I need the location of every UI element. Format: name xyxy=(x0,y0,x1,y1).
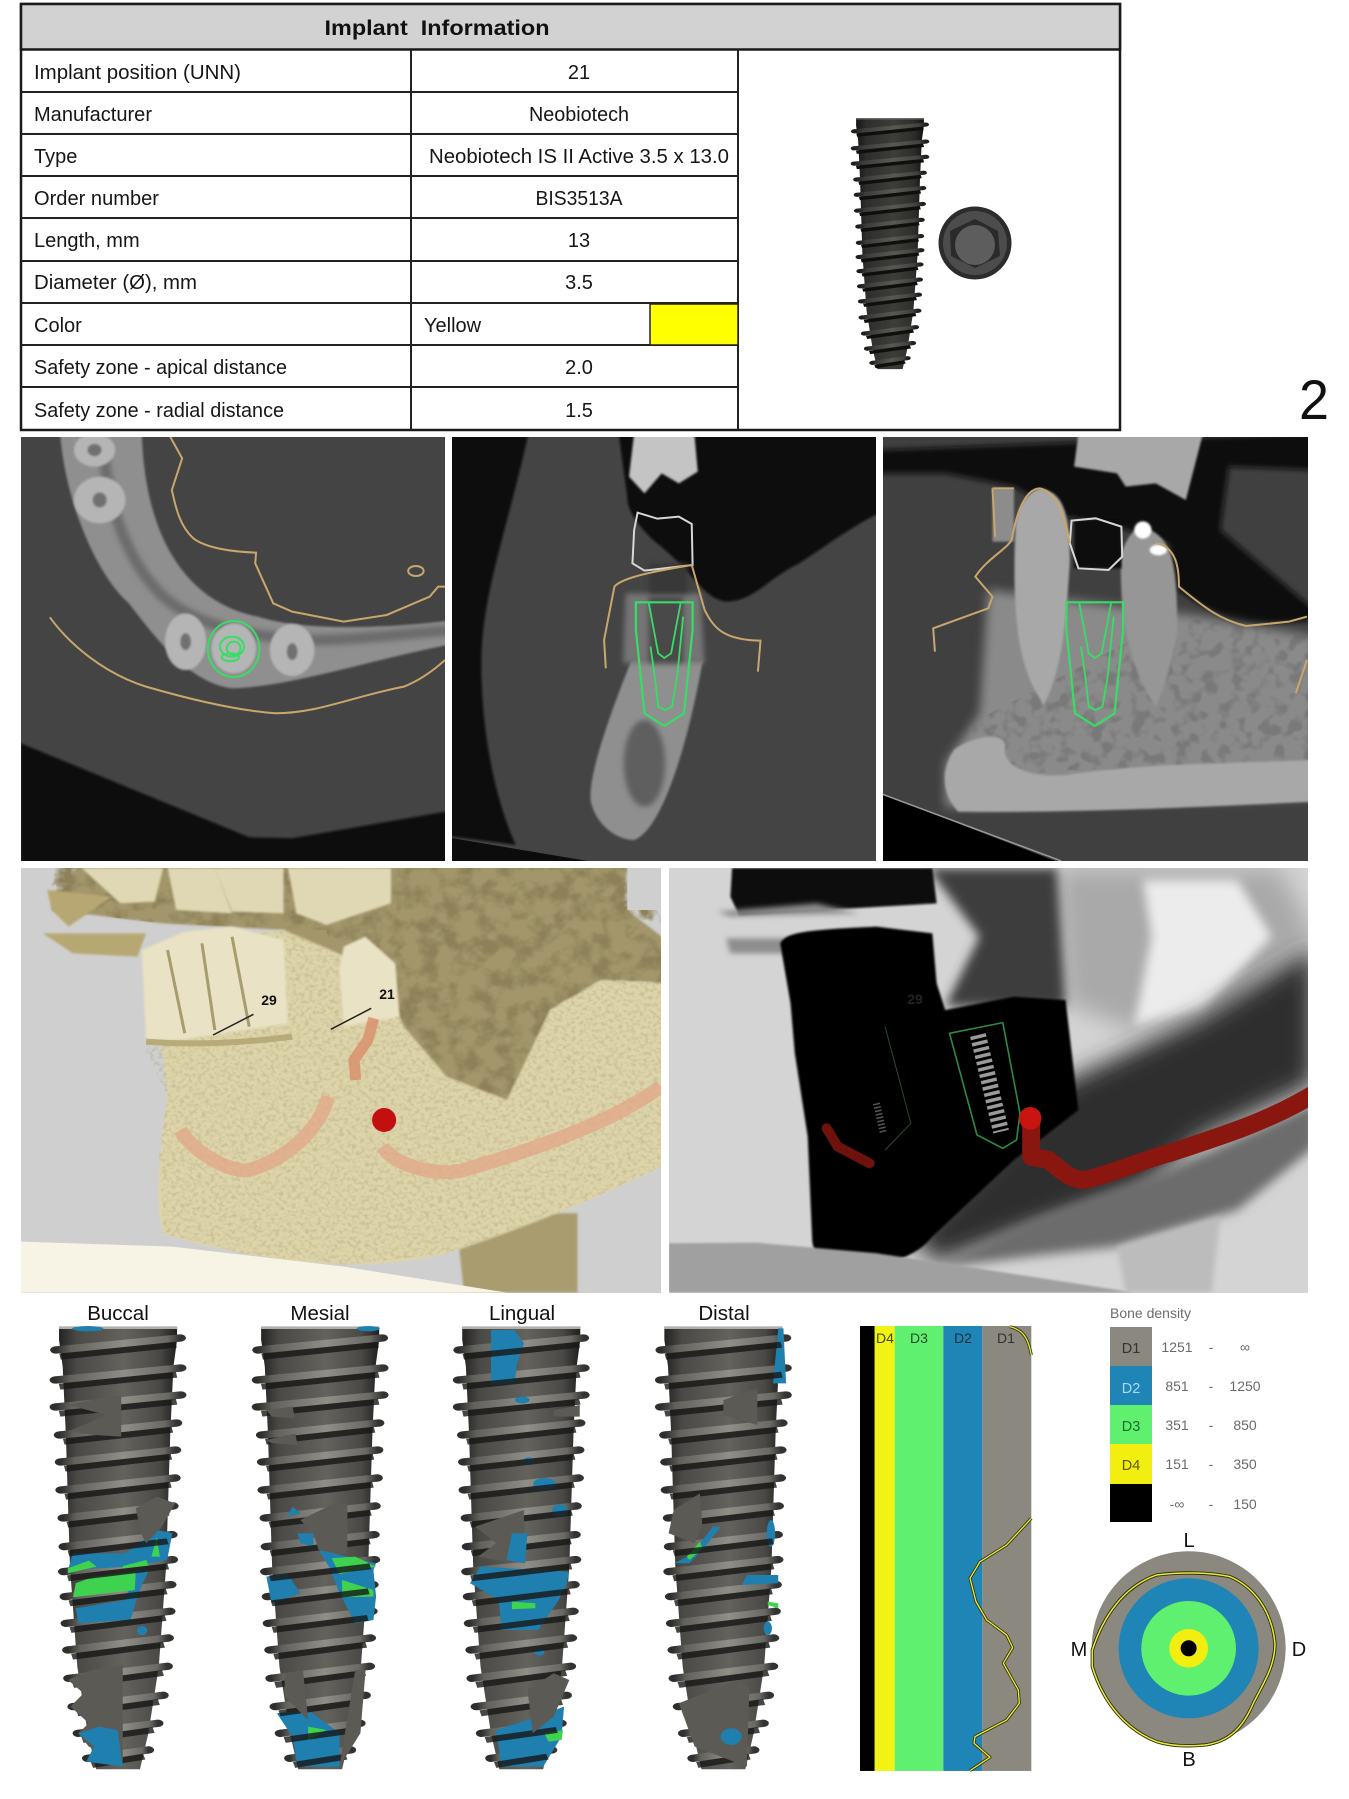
smear fragments xyxy=(718,903,859,953)
mesial flutes xyxy=(266,1407,366,1767)
legend ranges: 850 xyxy=(1233,1417,1257,1433)
black left band xyxy=(452,437,529,846)
buccal flutes xyxy=(68,1397,175,1763)
density profile strip xyxy=(860,1326,1031,1771)
crown outline xyxy=(632,513,693,571)
air gap xyxy=(619,433,885,602)
legend ranges xyxy=(1161,1339,1261,1512)
lingual green density xyxy=(512,1602,563,1742)
upper teeth xyxy=(1074,433,1203,500)
orientation letters: D xyxy=(1292,1639,1306,1661)
black bottom corner xyxy=(452,838,588,861)
legend ranges: - xyxy=(1209,1417,1214,1433)
legend ranges: ∞ xyxy=(1240,1339,1250,1355)
nerve canal: left segment xyxy=(180,1097,328,1170)
density strip labels: D4 xyxy=(876,1330,894,1346)
legend: bone density xyxy=(1110,1305,1261,1522)
white sinus area xyxy=(1134,880,1272,1027)
page number: 2 xyxy=(1299,368,1329,431)
table header: Implant Information xyxy=(324,17,550,40)
mandible translucent dark xyxy=(911,947,1315,1263)
view titles: Lingual xyxy=(489,1302,555,1325)
panel: cross-section CT slice xyxy=(443,433,885,863)
orientation letters: B xyxy=(1182,1749,1196,1771)
implant safety outline xyxy=(1066,602,1123,726)
lower border grey xyxy=(945,1103,1315,1263)
view titles: Distal xyxy=(698,1302,750,1325)
faint plate shadow xyxy=(1117,1217,1220,1293)
gum ridge xyxy=(146,1037,292,1043)
row values: 21 xyxy=(568,62,590,84)
legend ranges: - xyxy=(1209,1496,1214,1512)
small outline ring xyxy=(408,566,424,576)
label: 29: 29 xyxy=(261,992,277,1008)
row values: Neobiotech xyxy=(529,104,629,126)
row labels: Order number xyxy=(34,188,159,210)
row values: 13 xyxy=(568,230,590,252)
table grid rows xyxy=(21,50,738,430)
upper teeth xyxy=(82,868,391,925)
nerve canal: upper segment xyxy=(354,1018,374,1080)
row values: 2.0 xyxy=(565,357,593,379)
row labels: Manufacturer xyxy=(34,104,152,126)
legend swatch labels: D2 xyxy=(1122,1381,1140,1397)
radial density diagram xyxy=(1092,1551,1286,1746)
teeth in arch xyxy=(74,433,315,676)
background cancellous volume xyxy=(52,867,666,1103)
upper cortical plates xyxy=(623,593,705,663)
row values: 3.5 xyxy=(565,272,593,294)
orientation letters xyxy=(1071,1530,1306,1771)
bright filling xyxy=(1134,521,1167,555)
distal apical blue xyxy=(721,1728,742,1745)
left tooth xyxy=(1014,488,1070,705)
view titles xyxy=(87,1302,750,1325)
legend ranges: 151 xyxy=(1165,1456,1189,1472)
panel: implant information table xyxy=(21,4,1120,430)
distal blue density xyxy=(674,1328,786,1635)
black crown gap xyxy=(1074,520,1121,568)
density curve top xyxy=(1010,1327,1031,1355)
mandible bone xyxy=(590,660,703,840)
tooth root lines xyxy=(168,937,249,1033)
tooth marker lines xyxy=(213,1008,371,1035)
implant rings xyxy=(208,621,260,677)
lower back volume xyxy=(455,1213,577,1293)
mental foramen marker xyxy=(372,1108,396,1132)
black bottom corner xyxy=(883,795,1055,861)
implant site shadow xyxy=(649,597,683,663)
legend swatch labels: D3 xyxy=(1122,1419,1140,1435)
row labels: Color xyxy=(34,315,82,337)
mandible arch xyxy=(60,433,455,688)
density strip labels xyxy=(876,1330,1015,1346)
bottom plate xyxy=(669,1243,1134,1293)
mandibular bone xyxy=(945,590,1315,807)
implant 29 faint xyxy=(876,1027,911,1150)
gum outline xyxy=(604,565,760,672)
legend ranges: 1251 xyxy=(1161,1339,1193,1355)
implant 21 threads xyxy=(978,1035,1001,1132)
dark column xyxy=(928,868,1066,1007)
legend ranges: - xyxy=(1209,1378,1214,1394)
view titles: Mesial xyxy=(290,1302,350,1325)
implant illustration xyxy=(854,118,926,369)
tooth pulp spots xyxy=(88,444,297,660)
right tooth xyxy=(1121,527,1177,707)
row labels: Length, mm xyxy=(34,230,140,252)
legend ranges: 350 xyxy=(1233,1456,1257,1472)
row labels: Safety zone - apical distance xyxy=(34,357,287,379)
buccal blue density xyxy=(68,1326,172,1635)
row labels: Type xyxy=(34,146,77,168)
implant view: lingual xyxy=(459,1327,584,1769)
color swatch: yellow xyxy=(650,304,738,345)
legend swatches xyxy=(1110,1327,1152,1522)
upper air band xyxy=(876,433,1315,627)
upper gum fragments xyxy=(43,890,146,957)
buccal apical blue xyxy=(78,1727,123,1767)
row labels: Safety zone - radial distance xyxy=(34,400,284,422)
upper jaw black xyxy=(730,868,937,915)
implant inner outline xyxy=(1079,603,1114,710)
buccal green density xyxy=(68,1537,160,1597)
background mottle xyxy=(52,868,666,1103)
orientation letters: M xyxy=(1071,1639,1087,1661)
legend ranges: -∞ xyxy=(1170,1496,1184,1512)
legend title: Bone density xyxy=(1110,1305,1191,1321)
density strip labels: D1 xyxy=(997,1330,1015,1346)
density curve xyxy=(970,1518,1031,1771)
distal flutes xyxy=(669,1388,757,1767)
dark background corner xyxy=(21,743,455,863)
small root left xyxy=(992,488,1014,542)
row labels: Implant position (UNN) xyxy=(34,62,241,84)
legend swatch labels: D1 xyxy=(1122,1341,1140,1357)
nerve canal right xyxy=(1031,1093,1315,1180)
implant view: mesial xyxy=(257,1326,383,1769)
implant view: buccal xyxy=(55,1326,181,1769)
dark implant shadow xyxy=(649,563,687,593)
nerve canal: right segment xyxy=(382,1087,661,1172)
implant safety outline xyxy=(636,602,693,726)
lingual flute blue xyxy=(507,1533,528,1563)
trabecular cavity xyxy=(624,720,665,807)
mandible body xyxy=(150,930,666,1264)
lower jaw black xyxy=(780,927,1078,1268)
nerve marker xyxy=(1019,1107,1041,1130)
cortical bone strip xyxy=(945,737,1315,812)
crown outline xyxy=(1070,518,1122,570)
bone boundary curve xyxy=(1092,1573,1275,1746)
mesial green density xyxy=(308,1557,376,1740)
lingual flutes xyxy=(475,1405,580,1733)
panel: transparent 3D view xyxy=(669,868,1315,1293)
density strip labels: D3 xyxy=(910,1330,928,1346)
panel: 3D bone rendering xyxy=(21,867,666,1293)
label: 21: 21 xyxy=(379,986,395,1002)
legend ranges: 1250 xyxy=(1229,1378,1261,1394)
panel: axial CT slice xyxy=(21,433,455,863)
view titles: Buccal xyxy=(87,1302,149,1325)
row labels: Diameter (Ø), mm xyxy=(34,272,197,294)
gum outline xyxy=(933,488,1307,693)
distal green density xyxy=(687,1542,778,1608)
implant inner outline xyxy=(649,603,683,710)
legend swatch labels xyxy=(1122,1341,1140,1474)
table header xyxy=(21,4,1120,50)
nerve outline lower xyxy=(50,617,445,713)
orientation letters: L xyxy=(1183,1530,1195,1552)
legend ranges: 851 xyxy=(1165,1378,1189,1394)
slice edge line xyxy=(882,794,1061,861)
legend swatch labels: D4 xyxy=(1122,1458,1140,1474)
mandible texture xyxy=(146,930,666,1265)
implant 21 outline xyxy=(950,1023,1020,1148)
row labels xyxy=(34,62,287,422)
row values: BIS3513A xyxy=(536,188,623,210)
legend ranges: 150 xyxy=(1233,1496,1257,1512)
color value: Yellow xyxy=(424,315,482,337)
nerve canal left xyxy=(827,1128,870,1163)
label: 29 faint: 29 xyxy=(907,991,923,1007)
row values: Neobiotech IS II Active 3.5 x 13.0 xyxy=(429,146,729,168)
legend ranges: 351 xyxy=(1165,1417,1189,1433)
nerve outline upper xyxy=(170,437,445,622)
mesial blue density xyxy=(266,1326,380,1767)
white chin plate xyxy=(21,1242,507,1293)
trabecular pattern xyxy=(984,620,1308,773)
panel: panoramic CT slice xyxy=(876,433,1315,863)
density strip labels: D2 xyxy=(954,1330,972,1346)
upper right translucent skull xyxy=(1057,868,1315,1030)
implant view: distal xyxy=(661,1327,786,1769)
lingual blue density xyxy=(470,1330,569,1767)
marrow xyxy=(103,443,455,640)
legend ranges: - xyxy=(1209,1456,1214,1472)
row values xyxy=(429,62,729,422)
legend ranges: - xyxy=(1209,1339,1214,1355)
row values: 1.5 xyxy=(565,400,593,422)
implant top view xyxy=(938,206,1012,280)
lower teeth xyxy=(142,927,400,1040)
upper tooth xyxy=(629,433,698,493)
